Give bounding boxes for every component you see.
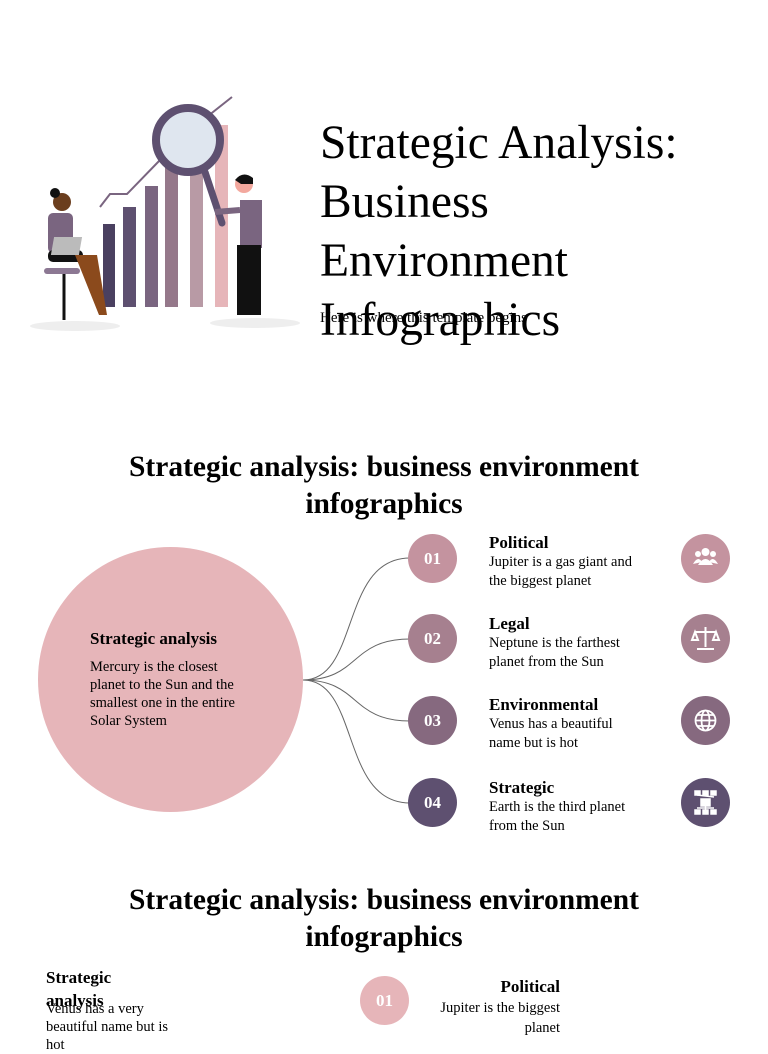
title: Strategic Analysis: Business Environment Infographics (320, 117, 678, 346)
political text right-aligned: Jupiter is the biggest planet (440, 1000, 560, 1036)
political text right-aligned (440, 977, 560, 1036)
subtitle: Here is where this template begins (320, 310, 527, 326)
item 03 environmental: 03 (424, 711, 441, 730)
icon: globe (681, 696, 730, 745)
text: Jupiter is a gas giant and the biggest planet (489, 554, 632, 589)
big circle: strategic analysis: Mercury is the closest planet to the Sun and the smallest one in the entire Solar System (90, 659, 235, 729)
item 01 political (408, 534, 457, 583)
item 02 legal (408, 614, 457, 663)
section heading 1: infographics (305, 488, 463, 520)
circle 01 (360, 976, 409, 1025)
item 02 legal: 02 (424, 629, 441, 648)
circle 01: 01 (376, 991, 393, 1010)
text: Neptune is the farthest planet from the Sun (489, 635, 620, 670)
text: Earth is the third planet from the Sun (489, 799, 625, 834)
icon: people (681, 534, 730, 583)
section heading 1 (129, 451, 639, 520)
big circle: strategic analysis: Strategic analysis (90, 629, 217, 648)
left text block: Strategic analysis (46, 968, 111, 1010)
item 03 environmental (408, 696, 457, 745)
item 04 strategic: 04 (424, 793, 441, 812)
political text right-aligned: Political (501, 977, 560, 996)
section heading 2: infographics (305, 921, 463, 953)
icon: hierarchy (681, 778, 730, 827)
icon: scales (681, 614, 730, 663)
illustration: analysts with chart (30, 96, 300, 331)
item 01 political: 01 (424, 549, 441, 568)
section heading 2: Strategic analysis: business environment (129, 884, 639, 916)
section heading 2 (129, 884, 639, 953)
connector lines (303, 558, 408, 804)
text: Strategic (489, 778, 554, 797)
text: Environmental (489, 695, 598, 714)
text: Venus has a very beautiful name but is hot (46, 1001, 168, 1053)
text: Legal (489, 614, 530, 633)
section heading 1: Strategic analysis: business environment (129, 451, 639, 483)
text: Political (489, 533, 548, 552)
big circle: strategic analysis (38, 547, 303, 812)
item 04 strategic (408, 778, 457, 827)
text: Venus has a beautiful name but is hot (489, 716, 613, 751)
left text block (46, 968, 168, 1053)
